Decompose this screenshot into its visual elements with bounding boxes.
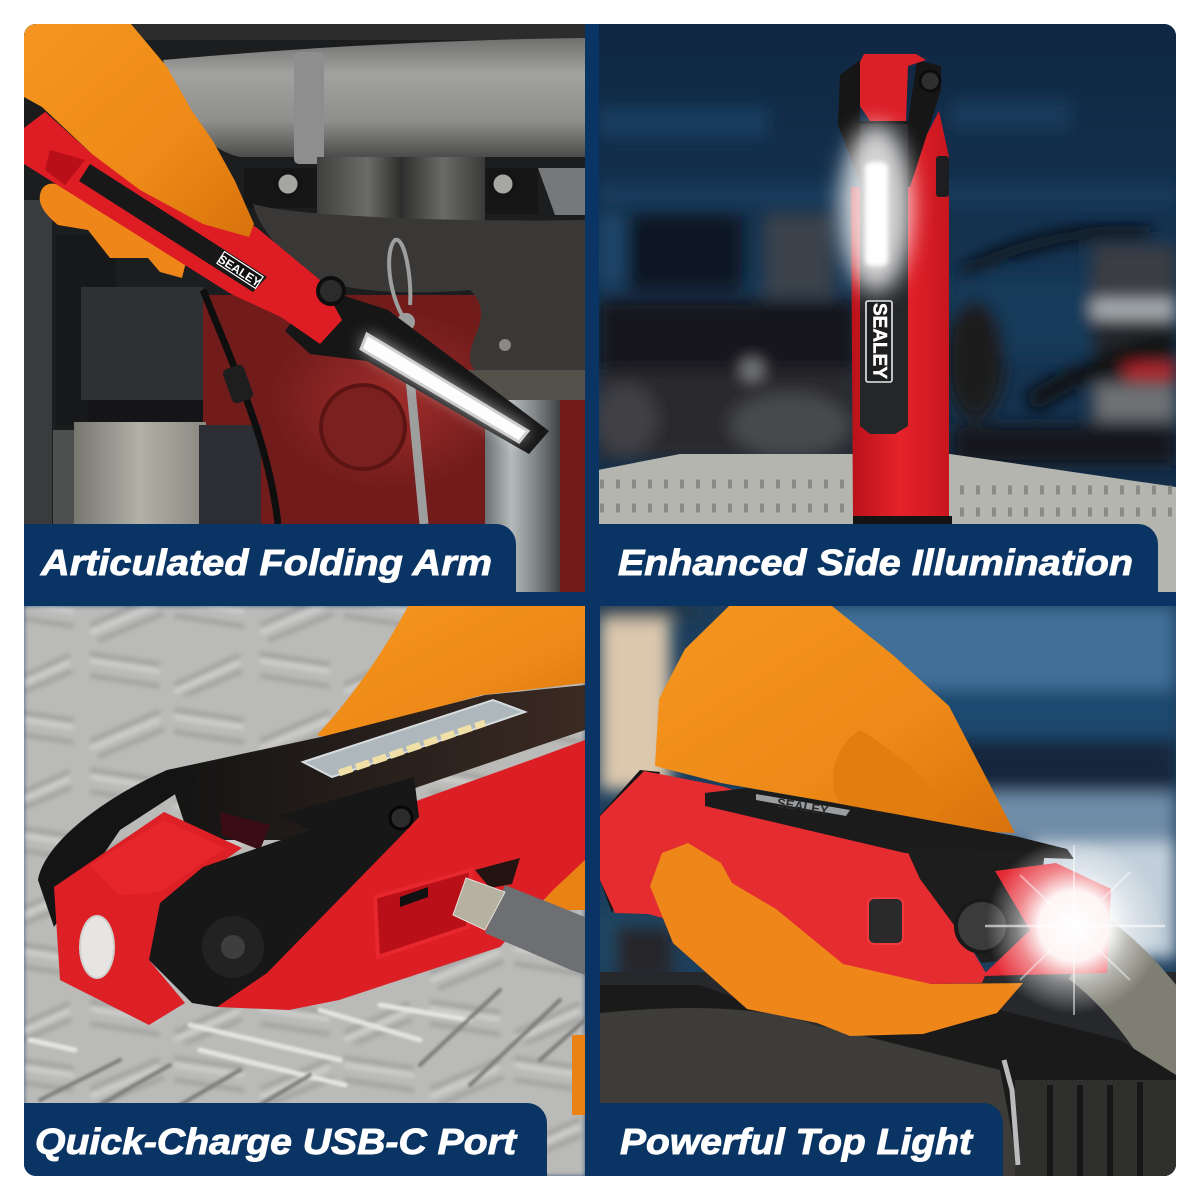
front arm — [149, 777, 419, 1007]
logo: SEALEY — [216, 252, 263, 290]
power button — [868, 898, 903, 944]
red head — [860, 54, 926, 121]
work light — [600, 770, 1111, 984]
circular cover — [321, 385, 405, 469]
blurred engine bay — [593, 100, 1176, 465]
tab: enhanced side illumination label — [585, 524, 1158, 606]
black arm — [905, 846, 1045, 963]
led glow — [840, 124, 912, 292]
logo — [756, 794, 850, 818]
cable — [203, 290, 278, 524]
lens window — [303, 700, 525, 777]
tab: quick-charge USB-C port label — [24, 1103, 547, 1176]
hose and upper shadow — [130, 24, 585, 40]
lower right glove fingers — [541, 830, 585, 1115]
dark cap surface — [600, 985, 1176, 1176]
tread plate surface — [598, 454, 1176, 592]
red housing — [217, 740, 585, 1010]
red body — [600, 771, 986, 984]
foreground tread streaks — [30, 990, 585, 1105]
background — [600, 606, 1176, 980]
panel: enhanced side illumination — [593, 24, 1176, 592]
usb-c cable — [453, 878, 585, 975]
pivot — [202, 916, 264, 978]
red handle — [24, 104, 342, 344]
flange under manifold — [463, 370, 585, 400]
work light — [24, 94, 549, 454]
hose — [1090, 950, 1190, 1075]
led chips — [339, 723, 485, 773]
tab: powerful top light label — [585, 1103, 1003, 1176]
black strip — [860, 124, 908, 434]
lower gloved fingers — [40, 184, 186, 278]
pivot — [318, 278, 344, 304]
pivot — [920, 71, 940, 91]
tab: articulated folding arm label: Articulated Folding Arm — [40, 542, 492, 583]
base — [853, 516, 952, 524]
side button — [936, 156, 949, 197]
black strip — [705, 788, 1074, 859]
standing work light — [838, 54, 952, 524]
logo: SEALEY — [868, 303, 890, 379]
manifold bolts — [278, 174, 512, 194]
led strip — [361, 334, 528, 442]
red head — [982, 863, 1111, 976]
red head — [54, 812, 242, 1025]
knuckle shading — [833, 730, 945, 824]
led glow — [361, 334, 528, 442]
left arm — [38, 770, 200, 927]
tab: enhanced side illumination label: Enhanced Side Illumination — [618, 542, 1133, 583]
black tail — [600, 770, 660, 913]
red body — [851, 111, 949, 524]
orange glove — [24, 24, 254, 237]
lens — [80, 916, 114, 978]
charging port recess — [375, 870, 471, 957]
black head arms — [838, 60, 941, 187]
vertical steel pipe — [485, 400, 560, 592]
ribbed crate — [1015, 1080, 1176, 1176]
tab: powerful top light label: Powerful Top Light — [620, 1121, 974, 1162]
lower glove fingers — [650, 843, 1023, 1036]
rating label — [79, 164, 267, 292]
manifold casting — [253, 204, 585, 377]
led — [865, 162, 888, 266]
dipstick — [389, 240, 424, 524]
shadowed cable recess — [475, 858, 520, 888]
dark cap backdrop — [600, 972, 1176, 1176]
lamp arm — [285, 287, 549, 454]
pivot — [956, 900, 1008, 952]
manifold runners — [317, 157, 485, 221]
lens flare — [985, 838, 1165, 1015]
panel: articulated folding arm — [24, 24, 585, 592]
exhaust pipe — [163, 38, 585, 164]
glove behind light — [317, 606, 585, 738]
tab: articulated folding arm label — [24, 524, 516, 606]
work light body — [38, 685, 585, 1025]
window recess — [220, 812, 270, 850]
mesh heat shield — [244, 168, 585, 215]
tab: quick-charge USB-C port label: Quick-Charge USB-C Port — [35, 1121, 518, 1162]
logo: SEALEY — [776, 795, 830, 818]
panel: powerful top light — [600, 606, 1190, 1176]
alternator — [53, 422, 261, 524]
panel: quick-charge USB-C port — [24, 606, 585, 1176]
machinery — [24, 200, 203, 524]
red engine block — [203, 295, 585, 592]
black top shell — [167, 685, 585, 840]
clip — [1004, 1060, 1018, 1165]
upper glove — [655, 606, 1015, 833]
screw socket — [390, 807, 412, 829]
